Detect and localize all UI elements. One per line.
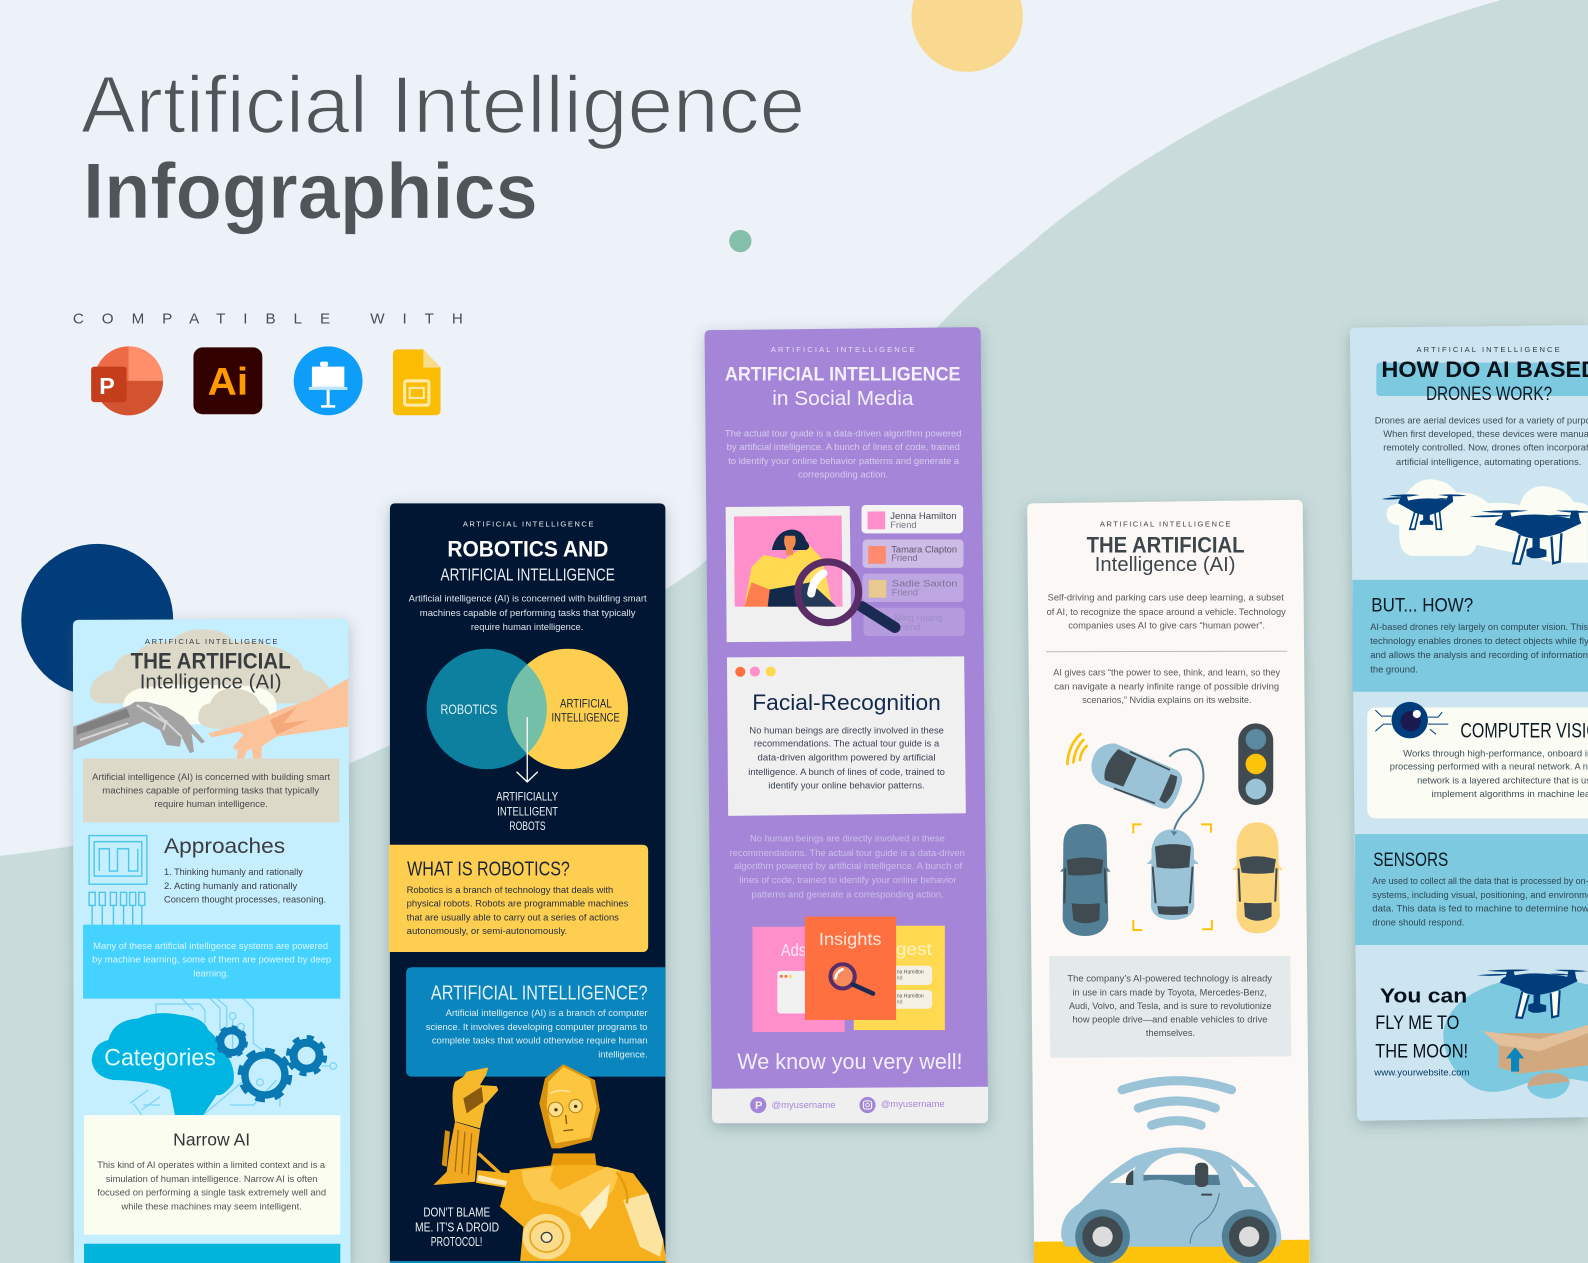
artificial intelligence box: science. It involves developing computer programs to bbox=[426, 1021, 648, 1032]
intro text: artificial intelligence, automating operations. bbox=[1396, 456, 1581, 467]
wifi arcs bbox=[1122, 1081, 1232, 1125]
computer vision box bbox=[1367, 707, 1588, 818]
intro text: Artificial intelligence (AI) is concerned with building smart bbox=[409, 593, 647, 604]
icon: large drone bbox=[1469, 510, 1588, 564]
intro text: require human intelligence. bbox=[471, 621, 583, 632]
icon: Google Slides bbox=[393, 349, 441, 415]
intro text: of AI, to recognize the space around a vehicle. Technology bbox=[1047, 606, 1286, 617]
tile: insights: Insights bbox=[819, 929, 882, 949]
panel: the artificial intelligence card bbox=[73, 619, 350, 1263]
friend list: Friend bbox=[892, 588, 918, 598]
robot illustration bbox=[433, 1064, 667, 1263]
facial recognition box: data-driven algorithm powered by artificial bbox=[758, 752, 935, 763]
card heading: ARTIFICIAL INTELLIGENCE bbox=[463, 520, 593, 529]
facial recognition box: Facial-Recognition bbox=[752, 690, 941, 715]
approaches block: Concern thought processes, reasoning. bbox=[164, 893, 326, 904]
card heading: ARTIFICIAL INTELLIGENCE bbox=[725, 365, 961, 386]
quote text: scenarios,” Nvidia explains on its website. bbox=[1082, 694, 1252, 705]
card heading: Intelligence (AI) bbox=[140, 672, 282, 694]
venn diagram: ARTIFICIAL bbox=[560, 696, 612, 710]
robot arm bbox=[73, 702, 205, 753]
facial recognition box: identify your online behavior patterns. bbox=[768, 780, 925, 791]
icon: Illustrator: Ai bbox=[208, 361, 248, 404]
card heading: THE ARTIFICIAL bbox=[131, 648, 291, 673]
how band: AI-based drones rely largely on computer vision. This bbox=[1370, 621, 1588, 632]
approaches block: 2. Acting humanly and rationally bbox=[164, 880, 298, 891]
circuit background bbox=[130, 998, 337, 1115]
narrow AI box: This kind of AI operates within a limited context and is a bbox=[97, 1159, 326, 1170]
clouds bbox=[1387, 479, 1588, 563]
friend list: Friend bbox=[890, 520, 917, 530]
approaches block: Approaches bbox=[164, 834, 285, 858]
tile: suggest: na Hamilton bbox=[897, 969, 924, 975]
intro box bbox=[83, 759, 339, 822]
footer: P bbox=[755, 1100, 763, 1112]
tile: suggest: nd bbox=[897, 1000, 903, 1006]
robot speech text: ME. IT'S A DROID bbox=[415, 1221, 499, 1235]
narrow AI box: while these machines may seem intelligent. bbox=[121, 1200, 302, 1211]
narrow AI box: focused on performing a single task extremely well and bbox=[97, 1187, 326, 1198]
tile: ads: Ads bbox=[781, 940, 806, 960]
intro box: Artificial intelligence (AI) is concerned with building smart bbox=[92, 771, 331, 782]
icon: magnifying glass bbox=[798, 562, 895, 627]
venn diagram: ROBOTICS bbox=[441, 702, 497, 718]
narrow AI box: simulation of human intelligence. Narrow AI is often bbox=[106, 1173, 317, 1184]
compatible with label: COMPATIBLE WITH bbox=[73, 311, 463, 328]
card heading bbox=[441, 520, 615, 584]
intro text bbox=[1047, 592, 1286, 631]
friend list: Friend bbox=[894, 622, 921, 632]
friend list: Ming Huang bbox=[894, 613, 943, 623]
company text box: The company’s AI-powered technology is already bbox=[1067, 972, 1272, 983]
what is robotics box bbox=[389, 845, 648, 952]
categories brain cloud: Categories bbox=[104, 1044, 216, 1071]
decorative navy circle bbox=[21, 544, 173, 696]
company text box: themselves. bbox=[1146, 1027, 1195, 1038]
second paragraph: lines of code, trained to identify your online behavior bbox=[739, 874, 957, 885]
parking arrow bbox=[1169, 749, 1203, 833]
tagline: We know you very well! bbox=[737, 1049, 963, 1074]
icon: yellow signal bbox=[1067, 734, 1087, 764]
tile: insights bbox=[805, 917, 896, 1020]
icon: Illustrator bbox=[193, 347, 262, 414]
icon: Keynote bbox=[294, 346, 363, 415]
icon: PowerPoint: P bbox=[99, 373, 115, 399]
card heading bbox=[131, 637, 291, 694]
bottom strip bbox=[390, 1261, 665, 1263]
panel: self driving card bbox=[1027, 500, 1310, 1263]
what is robotics box: Robotics is a branch of technology that deals with bbox=[407, 884, 613, 895]
human hand bbox=[208, 678, 348, 766]
facial recognition box: recommendations. The actual tour guide is a bbox=[754, 738, 940, 749]
bottom strip bbox=[84, 1244, 340, 1263]
icon: gears bbox=[217, 1027, 325, 1100]
artificial intelligence box: intelligence. bbox=[598, 1048, 648, 1059]
icon: circuit chip bbox=[89, 836, 147, 925]
facial recognition box bbox=[727, 656, 966, 816]
artificial intelligence box: Artificial intelligence (AI) is a branch of computer bbox=[446, 1007, 648, 1018]
approaches block: 1. Thinking humanly and rationally bbox=[164, 866, 303, 877]
intro text: corresponding action. bbox=[798, 469, 888, 480]
panel: robotics card bbox=[389, 503, 667, 1263]
traffic light bbox=[1238, 723, 1273, 805]
categories brain cloud bbox=[92, 1013, 234, 1115]
sensors band: data. This data is fed to machine to determine how a bbox=[1372, 903, 1588, 914]
card heading: ARTIFICIAL INTELLIGENCE bbox=[441, 564, 615, 584]
artificial intelligence box bbox=[406, 967, 665, 1077]
closing text: You can bbox=[1380, 986, 1467, 1008]
card heading: in Social Media bbox=[772, 388, 914, 410]
how band: BUT... HOW? bbox=[1371, 596, 1473, 617]
card heading: Intelligence (AI) bbox=[1095, 554, 1236, 576]
venn result text: ARTIFICIALLY bbox=[496, 790, 558, 804]
bottom blob bbox=[1443, 979, 1588, 1092]
how band: the ground. bbox=[1370, 664, 1418, 675]
robot speech text bbox=[415, 1205, 499, 1249]
intro text bbox=[1375, 414, 1588, 467]
angled car bbox=[1091, 743, 1182, 809]
footer: @myusername bbox=[881, 1099, 945, 1110]
second paragraph: recommendations. The actual tour guide is a data-driven bbox=[730, 847, 965, 858]
card heading bbox=[1376, 345, 1588, 405]
machine learning box bbox=[83, 925, 340, 999]
machine learning box: by machine learning, some of them are powered by deep bbox=[92, 954, 331, 965]
intro text: by artificial intelligence. A bunch of lines of code, trained bbox=[727, 441, 960, 452]
icon: PowerPoint bbox=[91, 346, 163, 415]
tile: ads bbox=[752, 927, 845, 1032]
venn diagram: INTELLIGENCE bbox=[552, 711, 620, 725]
icon: eye with circuits bbox=[1375, 702, 1448, 738]
card heading bbox=[725, 345, 961, 410]
card heading: THE ARTIFICIAL bbox=[1087, 533, 1245, 558]
road strip bbox=[1034, 1240, 1309, 1263]
quote text: AI gives cars “the power to see, think, and learn, so they bbox=[1053, 667, 1280, 678]
sensors band bbox=[1355, 834, 1588, 945]
narrow AI box: Narrow AI bbox=[173, 1130, 250, 1150]
what is robotics box: WHAT IS ROBOTICS? bbox=[407, 859, 570, 881]
quote text: can navigate a nearly infinite range of possible driving bbox=[1054, 681, 1279, 692]
tile: suggest: nd bbox=[897, 975, 903, 981]
facial recognition box: No human beings are directly involved in these bbox=[749, 724, 944, 735]
venn result text: ROBOTS bbox=[509, 819, 546, 833]
card heading: ARTIFICIAL INTELLIGENCE bbox=[1417, 345, 1560, 354]
second paragraph: No human beings are directly involved in these bbox=[750, 833, 945, 844]
company text box: in use in cars made by Toyota, Mercedes-Benz, bbox=[1073, 987, 1267, 998]
company text box: how people drive—and enable vehicles to drive bbox=[1073, 1013, 1267, 1024]
intro box: require human intelligence. bbox=[154, 798, 268, 809]
approaches block bbox=[164, 834, 326, 904]
card heading: ARTIFICIAL INTELLIGENCE bbox=[1100, 520, 1230, 529]
profile photo bbox=[726, 506, 851, 642]
card heading: ARTIFICIAL INTELLIGENCE bbox=[145, 637, 277, 646]
closing text bbox=[1373, 986, 1470, 1079]
icon: delivery box bbox=[1483, 1025, 1588, 1099]
intro text: to identify your online behavior patterns and generate a bbox=[728, 455, 960, 466]
friend list: Tamara Clapton bbox=[891, 544, 957, 554]
card heading bbox=[1087, 520, 1245, 576]
title bbox=[81, 61, 805, 235]
artificial intelligence box: complete tasks that would otherwise require human bbox=[432, 1035, 648, 1046]
intro text bbox=[409, 593, 647, 632]
facial recognition box: intelligence. A bunch of lines of code, trained to bbox=[748, 766, 945, 777]
machine learning box: learning. bbox=[193, 967, 229, 978]
robot speech text: PROTOCOL! bbox=[431, 1235, 482, 1249]
friend list: Friend bbox=[891, 553, 918, 563]
intro text bbox=[725, 428, 962, 480]
artificial intelligence box: ARTIFICIAL INTELLIGENCE? bbox=[431, 983, 648, 1005]
quote text bbox=[1053, 667, 1280, 705]
friend list bbox=[862, 505, 965, 636]
company text box: Audi, Volvo, and Tesla, and is sure to revolutionize bbox=[1069, 1000, 1272, 1011]
card heading: HOW DO AI BASED bbox=[1381, 357, 1588, 382]
what is robotics box: autonomously, or semi-autonomously. bbox=[407, 925, 567, 936]
parked car: light blue bbox=[1147, 829, 1199, 920]
friend list: Jenna Hamilton bbox=[890, 511, 957, 521]
intro text: machines capable of performing tasks that typically bbox=[420, 607, 636, 618]
card heading: DRONES WORK? bbox=[1426, 384, 1552, 405]
machine learning box: Many of these artificial intelligence systems are powered bbox=[93, 940, 328, 951]
closing text: www.yourwebsite.com bbox=[1373, 1068, 1470, 1079]
decorative yellow circle bbox=[911, 0, 1023, 72]
decorative teal dot bbox=[729, 230, 751, 252]
second paragraph: patterns and generate a corresponding action. bbox=[751, 888, 944, 899]
intro box: machines capable of performing tasks that typically bbox=[102, 785, 319, 796]
intro text: remotely controlled. Now, drones often incorporate bbox=[1383, 442, 1588, 453]
closing text: THE MOON! bbox=[1375, 1041, 1468, 1062]
card heading: ROBOTICS AND bbox=[447, 537, 608, 562]
self driving car bbox=[1061, 1147, 1281, 1263]
company text box bbox=[1049, 956, 1291, 1058]
icon: delivery drone bbox=[1477, 969, 1588, 1018]
footer: @myusername bbox=[772, 1100, 835, 1111]
panel: social media card bbox=[705, 327, 988, 1123]
panel: drones card bbox=[1350, 325, 1588, 1121]
tile: suggest bbox=[854, 926, 945, 1030]
clouds bbox=[90, 629, 330, 730]
second paragraph bbox=[730, 833, 965, 899]
intro text: The actual tour guide is a data-driven algorithm powered bbox=[725, 428, 962, 439]
second paragraph: algorithm powered by artificial intelligence. A bunch of bbox=[734, 860, 963, 871]
parked car: yellow bbox=[1232, 822, 1283, 933]
venn diagram bbox=[427, 649, 628, 769]
card heading: ARTIFICIAL INTELLIGENCE bbox=[771, 345, 915, 354]
icon: small drone bbox=[1382, 494, 1467, 529]
what is robotics box: that are usually able to carry out a series of actions bbox=[407, 911, 619, 922]
how band bbox=[1353, 580, 1588, 692]
sensors band: SENSORS bbox=[1373, 850, 1448, 871]
footer bbox=[712, 1087, 988, 1123]
closing text: FLY ME TO bbox=[1375, 1013, 1459, 1034]
what is robotics box: physical robots. Robots are programmable machines bbox=[407, 897, 629, 908]
intro text: Self-driving and parking cars use deep learning, a subset bbox=[1048, 592, 1284, 603]
title: Infographics bbox=[83, 146, 538, 235]
parked car: teal bbox=[1060, 824, 1111, 936]
narrow AI box bbox=[84, 1115, 340, 1235]
robot speech text: DON'T BLAME bbox=[423, 1205, 490, 1219]
arrow bbox=[517, 717, 538, 782]
friend list: Sadie Saxton bbox=[892, 578, 958, 588]
tile: suggest: na Hamilton bbox=[897, 994, 924, 1000]
parking illustration bbox=[1060, 723, 1283, 936]
venn result text bbox=[496, 790, 558, 833]
sensors band: drone should respond. bbox=[1372, 917, 1464, 928]
intro text: companies uses AI to give cars “human power”. bbox=[1068, 620, 1265, 631]
tile: suggest: gest bbox=[896, 939, 932, 959]
venn result text: INTELLIGENT bbox=[497, 804, 558, 818]
parking brackets bbox=[1133, 824, 1212, 930]
title: Artificial Intelligence bbox=[81, 61, 805, 151]
